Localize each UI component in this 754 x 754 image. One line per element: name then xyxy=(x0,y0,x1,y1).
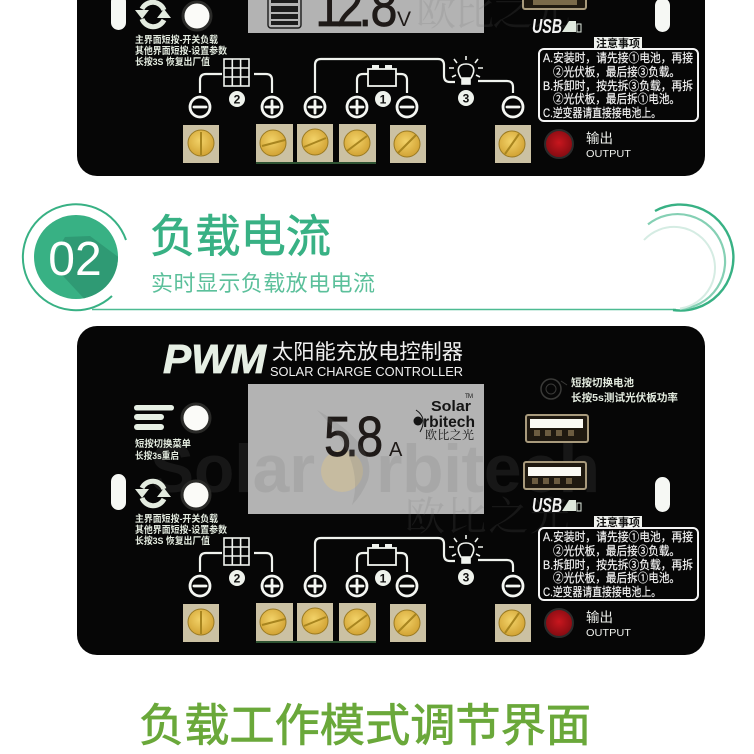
brand logo: TM xyxy=(465,394,473,400)
minus xyxy=(190,576,210,596)
brand logo: rbitech xyxy=(423,414,475,431)
panel: bottom controller (current display) xyxy=(77,326,705,655)
marker 2 xyxy=(229,570,245,586)
icon: menu xyxy=(134,405,174,430)
slot right xyxy=(655,0,670,32)
output label: OUTPUT xyxy=(586,148,632,160)
marker 3 xyxy=(458,569,474,585)
badge 02 xyxy=(23,204,126,310)
icon: light bulb xyxy=(449,535,483,563)
icon: battery xyxy=(368,65,396,86)
marker 2: 2 xyxy=(234,92,241,106)
output label: OUTPUT xyxy=(586,627,632,639)
load button instructions xyxy=(135,513,227,547)
wiring diagram xyxy=(190,56,523,117)
notice text: A.安装时，请先接①电池，再接 xyxy=(543,50,693,65)
watermark: logo: Solar xyxy=(150,431,315,507)
output LED xyxy=(545,609,573,637)
marker 1 xyxy=(375,91,391,107)
wires xyxy=(200,538,513,572)
icon: refresh xyxy=(135,2,171,27)
notice text: B.拆卸时，按先拆③负载，再拆 xyxy=(543,78,693,93)
minus xyxy=(190,97,210,117)
notice text: B.拆卸时，按先拆③负载，再拆 xyxy=(543,557,693,572)
plus xyxy=(347,97,367,117)
menu button xyxy=(182,404,210,432)
icon: solar panel xyxy=(224,538,249,565)
notice text: C.逆变器请直接接电池上。 xyxy=(543,584,661,599)
heading: 负载电流 xyxy=(150,211,331,262)
icon: battery xyxy=(368,544,396,565)
plus xyxy=(305,576,325,596)
output label xyxy=(586,131,632,160)
output label: 输出 xyxy=(586,610,613,625)
brand logo: Solar xyxy=(431,398,471,415)
menu button instructions: 长按3s重启 xyxy=(135,450,179,462)
bottom heading: 负载工作模式调节界面 xyxy=(139,700,591,751)
button instructions: 长按3S 恢复出厂值 xyxy=(135,56,210,68)
subheading: 实时显示负载放电电流 xyxy=(151,271,375,296)
slot left xyxy=(111,474,126,510)
plus xyxy=(347,576,367,596)
product title Chinese: 太阳能充放电控制器 xyxy=(272,341,463,364)
marker 3 xyxy=(458,90,474,106)
PWM logo: PWM xyxy=(163,336,267,382)
notice text: A.安装时，请先接①电池，再接 xyxy=(543,529,693,544)
notice text: ②光伏板，最后接③负载。 xyxy=(553,543,680,558)
plus xyxy=(262,97,282,117)
battery switch instructions: 短按切换电池 xyxy=(571,376,634,389)
marker 1: 1 xyxy=(380,92,387,106)
wires xyxy=(200,59,513,93)
current reading: 5.8 xyxy=(324,405,383,469)
button instructions xyxy=(135,34,227,68)
notice box xyxy=(539,515,698,600)
load button instructions: 主界面短按-开关负载 xyxy=(135,513,218,525)
badge 02: 02 xyxy=(48,233,102,286)
voltage unit: V xyxy=(397,8,411,31)
minus xyxy=(397,576,417,596)
USB port 1 xyxy=(526,415,588,442)
marker 1 xyxy=(375,570,391,586)
notice text: C.逆变器请直接接电池上。 xyxy=(543,105,661,120)
USB port 2 xyxy=(524,462,586,489)
notice text: ②光伏板，最后拆①电池。 xyxy=(553,570,680,585)
terminals xyxy=(183,124,531,163)
notice title: 注意事项 xyxy=(596,36,640,50)
watermark: logo xyxy=(150,410,600,539)
LCD voltage screen xyxy=(248,0,484,39)
wiring diagram xyxy=(190,535,523,596)
menu button instructions: 短按切换菜单 xyxy=(135,438,191,450)
watermark: logo: rbitech xyxy=(376,431,600,507)
terminals xyxy=(183,603,531,642)
USB mark: USB xyxy=(532,495,562,517)
minus xyxy=(503,576,523,596)
icon: refresh xyxy=(135,481,171,506)
header rule and arcs xyxy=(92,205,733,311)
load button instructions: 其他界面短按-设置参数 xyxy=(135,524,227,536)
output LED xyxy=(545,130,573,158)
controller body top xyxy=(77,0,705,176)
battery switch instructions: 长按5s测试光伏板功率 xyxy=(571,391,678,404)
notice box xyxy=(539,36,698,121)
button instructions: 主界面短按-开关负载 xyxy=(135,34,218,46)
marker 3: 3 xyxy=(463,570,470,584)
battery switch button xyxy=(541,379,567,399)
minus xyxy=(503,97,523,117)
section header: 02 load current xyxy=(23,204,733,311)
notice text xyxy=(543,529,693,599)
output label xyxy=(586,610,632,639)
slot right xyxy=(655,477,670,512)
brand logo: 欧比之光 xyxy=(425,427,474,442)
notice text: ②光伏板，最后接③负载。 xyxy=(553,64,680,79)
load button instructions: 长按3S 恢复出厂值 xyxy=(135,535,210,547)
notice text xyxy=(543,50,693,120)
controller body xyxy=(77,326,705,655)
battery switch instructions xyxy=(571,376,678,404)
plus xyxy=(262,576,282,596)
minus xyxy=(397,97,417,117)
slot left xyxy=(111,0,126,30)
marker 3: 3 xyxy=(463,92,470,106)
button instructions: 其他界面短按-设置参数 xyxy=(135,45,227,57)
output label: 输出 xyxy=(586,131,613,146)
USB port xyxy=(523,0,586,9)
marker 1: 1 xyxy=(380,572,387,586)
icon: light bulb xyxy=(449,56,483,84)
marker 2 xyxy=(229,91,245,107)
watermark sun xyxy=(321,450,363,492)
brand logo xyxy=(414,394,475,442)
notice text: ②光伏板，最后拆①电池。 xyxy=(553,91,680,106)
panel: top controller (voltage display) xyxy=(77,0,705,176)
notice title: 注意事项 xyxy=(596,515,640,529)
current unit: A xyxy=(389,439,403,461)
product title English: SOLAR CHARGE CONTROLLER xyxy=(270,364,463,379)
menu button instructions xyxy=(135,438,191,462)
icon: solar panel xyxy=(224,59,249,86)
load button xyxy=(182,481,210,509)
plus xyxy=(305,97,325,117)
battery icon xyxy=(268,0,301,28)
LCD current screen xyxy=(248,384,484,514)
USB mark: USB xyxy=(532,16,562,38)
watermark: logo: 欧比之光 xyxy=(405,494,570,539)
marker 2: 2 xyxy=(234,572,241,586)
button xyxy=(183,2,211,30)
